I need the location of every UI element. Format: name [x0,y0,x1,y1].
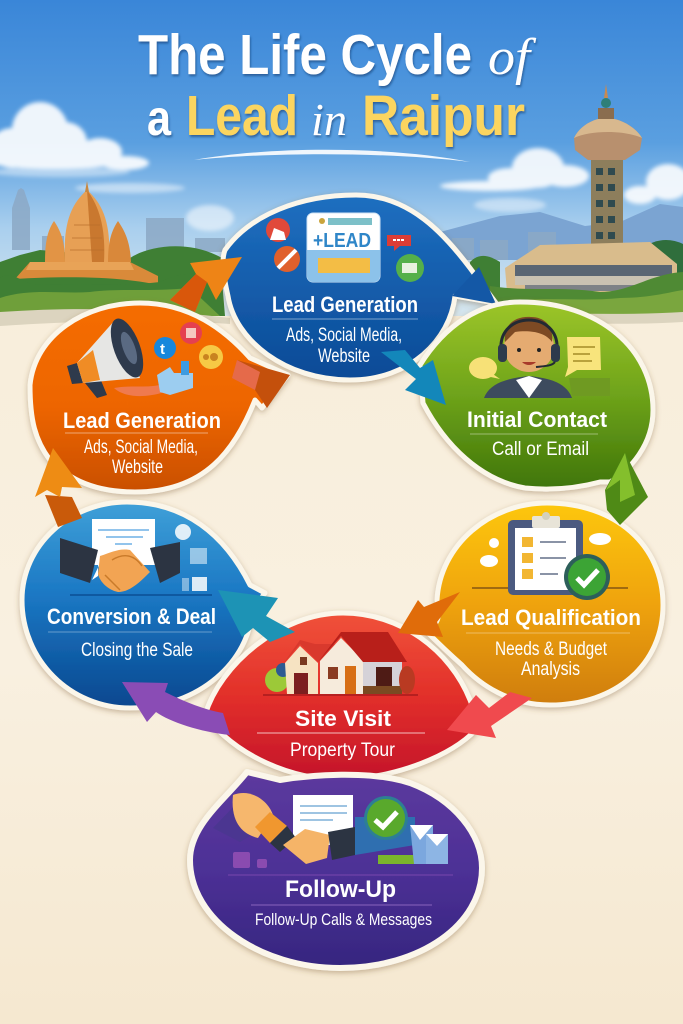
title: in [311,94,347,145]
arrow: qualification to site visit (red) [447,692,532,738]
panel: lead generation (top) [223,195,496,380]
icon: lead card [307,213,380,282]
title: of [488,29,537,86]
panel: initial contact [420,302,653,489]
icon: handshake and contract [60,519,212,595]
arrow: qualification to site visit [398,592,460,637]
background: cream lower page [0,300,683,1024]
clouds right [440,148,683,212]
icon: handshake, document and check [213,793,453,875]
clouds left [0,102,234,231]
text: lead generation heading: Lead Generation [272,292,418,317]
panel: conversion and deal [22,502,265,708]
text: initial contact detail: Call or Email [492,439,589,460]
arrow: into initial contact (blue tail) [452,267,496,304]
text: lead generation heading: Lead Generation [63,408,221,433]
text: site visit heading: Site Visit [295,706,392,731]
panel: follow-up [190,772,482,968]
trees behind landmarks [0,240,683,316]
arrow: initial contact to qualification [605,453,648,525]
text: follow-up detail: Follow-Up Calls & Messages [255,910,432,929]
arrow: lead generation to top bubble [170,257,242,312]
panel: site visit [205,613,480,780]
arrow: site visit to conversion (purple) [122,682,230,735]
icon: social badges [266,218,424,282]
icon: call agent with headset [484,317,572,398]
distant skyline and mountains [12,188,683,260]
foreground trees and ground strip [0,272,683,326]
panel: lead qualification [425,503,663,705]
text: follow-up heading: Follow-Up [285,876,396,903]
text: lead qualification detail [495,639,608,680]
title: a [147,90,172,146]
text: lead qualification detail: Needs & Budget [495,639,608,660]
text: lead qualification heading: Lead Qualification [461,605,641,630]
icon: megaphone [67,314,150,398]
temple [15,181,158,285]
icon: thumbs up and social badges [114,322,223,396]
icon: houses [263,632,418,695]
text: site visit detail: Property Tour [290,740,396,761]
panel: lead generation (left) [30,303,288,492]
arrow: site visit to conversion (teal) [218,590,295,642]
text: lead generation detail: Website [318,346,370,367]
text: lead generation detail: Website [112,457,163,478]
tower [505,84,677,292]
title underline arc [194,150,470,162]
icon: speech bubbles and folder [469,337,610,396]
title: The Life Cycle [138,23,472,87]
text: lead qualification detail: Analysis [521,659,580,680]
icon: clipboard checklist [472,512,628,600]
text: initial contact heading: Initial Contact [467,407,608,432]
icon: decorative clouds [480,533,611,567]
arrow: top bubble to initial contact [381,350,446,405]
text: conversion detail: Closing the Sale [81,640,193,661]
title: Lead [186,84,298,148]
text: lead generation detail: Ads, Social Media, [84,437,198,458]
title [138,23,537,148]
sky [0,0,683,316]
title: Raipur [362,84,525,148]
icon: floating squares [175,524,207,591]
icon: lead card: +LEAD [313,230,371,252]
icon: thumbs up and social badges: t [160,341,165,358]
arrow: conversion to lead generation [35,448,82,527]
text: lead generation detail [84,437,198,478]
text: lead generation detail: Ads, Social Media, [286,325,402,346]
text: conversion heading: Conversion & Deal [47,604,216,629]
arrow: lead generation to top bubble (tail) [232,360,290,408]
text: lead generation detail [286,325,402,367]
